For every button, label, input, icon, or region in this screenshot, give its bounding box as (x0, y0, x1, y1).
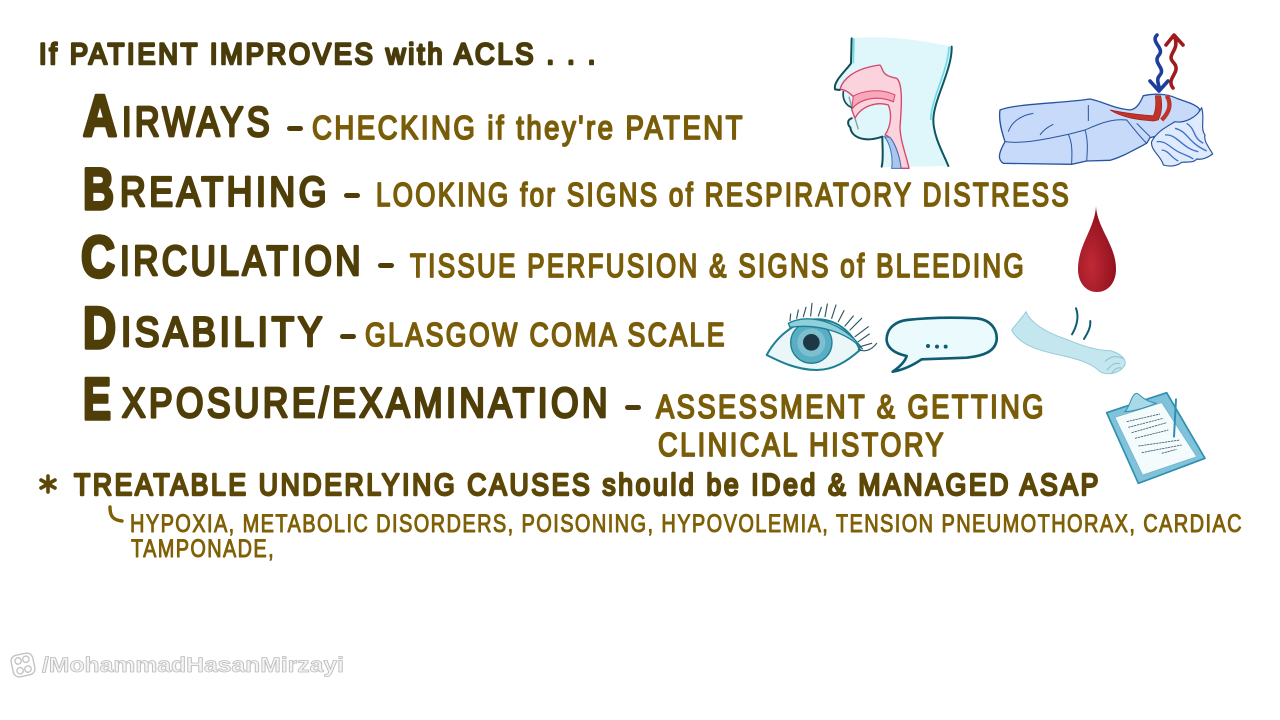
heading: circulation: IRCULATION (120, 237, 364, 284)
icon: clipboard (1107, 393, 1205, 483)
row: exposure (83, 367, 1046, 463)
airway (1110, 96, 1162, 121)
heading: breathing: REATHING (120, 168, 330, 215)
row: breathing (83, 157, 1071, 222)
description: disability: GLASGOW COMA SCALE (365, 316, 727, 353)
heading: circulation: C (81, 225, 115, 290)
description: airways: CHECKING if they're PATENT (312, 109, 745, 146)
heading: airways: IRWAYS (122, 98, 273, 145)
hair (1152, 108, 1213, 166)
heading: airways: A (83, 84, 117, 149)
description: circulation: TISSUE PERFUSION & SIGNS of BLEEDING (410, 247, 1026, 284)
heading: exposure (83, 367, 611, 432)
icon: patient lying with airflow (999, 35, 1213, 166)
icon: airway cross-section (835, 37, 952, 168)
heading: disability (83, 296, 326, 361)
heading: exposure: E (83, 367, 111, 432)
arrow: exhale (1166, 35, 1183, 88)
title: If PATIENT IMPROVES with ACLS . . . (39, 38, 598, 71)
arrow: hook (110, 507, 122, 521)
watermark (10, 652, 344, 678)
description: exposure (656, 388, 1046, 463)
icon: watermark logo (10, 652, 36, 678)
icon: eye (767, 303, 877, 370)
icon: asterisk (41, 476, 55, 492)
heading: breathing: B (83, 157, 114, 222)
heading: circulation (81, 225, 364, 290)
heading: breathing (83, 157, 330, 222)
heading: exposure: XPOSURE/EXAMINATION (122, 379, 611, 426)
description: breathing: LOOKING for SIGNS of RESPIRATORY DISTRESS (376, 176, 1071, 213)
heading: disability: D (83, 296, 116, 361)
description: exposure: CLINICAL HISTORY (658, 426, 946, 463)
row: disability (83, 296, 727, 361)
note: treatable causes: TREATABLE UNDERLYING CAUSES should be IDed & MANAGED ASAP (74, 467, 1101, 502)
list: underlying causes (110, 507, 1243, 563)
description: exposure: ASSESSMENT & GETTING (656, 388, 1046, 425)
icon: blood drop (1078, 206, 1116, 292)
list: underlying causes: TAMPONADE, (131, 535, 275, 563)
body (999, 94, 1200, 164)
arrow: inhale (1150, 35, 1168, 91)
icon: arm withdrawing (1012, 308, 1125, 374)
heading: airways (83, 84, 273, 149)
row: circulation (81, 225, 1026, 290)
heading: disability: ISABILITY (121, 308, 326, 355)
icon: speech bubble (887, 318, 997, 372)
watermark: /MohammadHasanMirzayi (42, 654, 344, 677)
row: airways (83, 84, 745, 149)
